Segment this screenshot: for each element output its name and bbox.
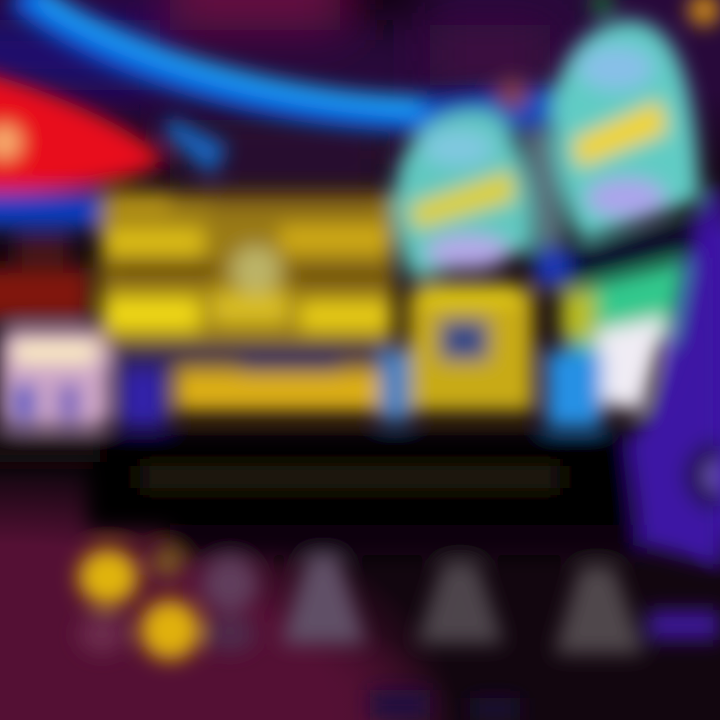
yellow sign block xyxy=(100,192,394,428)
black counter xyxy=(0,434,640,555)
machine divider band xyxy=(496,0,720,292)
small machine at left xyxy=(0,328,110,428)
slot machine lower: yellow xyxy=(380,284,534,422)
slot machine top: right xyxy=(524,20,700,256)
red sign xyxy=(0,68,165,192)
button icons xyxy=(202,556,644,654)
yellow coins xyxy=(78,547,200,660)
purple right cabinet xyxy=(628,188,720,640)
background glows xyxy=(0,0,550,190)
blue neon arc xyxy=(20,0,555,176)
left blue band and lower-left sign xyxy=(0,192,105,320)
bottom floor details xyxy=(370,690,520,720)
slot machine top: left xyxy=(394,110,534,280)
slot machine lower: green and white xyxy=(546,258,688,428)
